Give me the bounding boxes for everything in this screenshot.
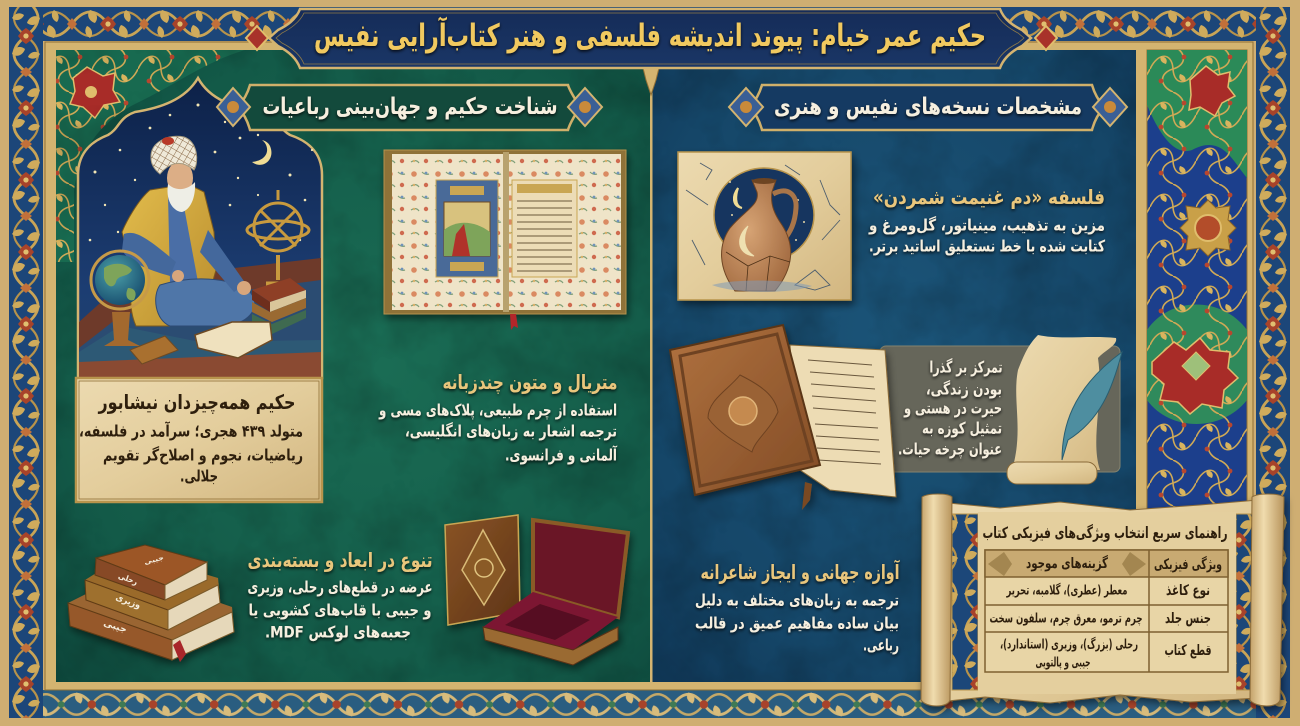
text block: transience: بودن زندگی، [926,380,1002,398]
ornament: red flower lower [1152,338,1238,414]
text block: materials: استفاده از چرم طبیعی، پلاک‌های مسی و [378,400,617,420]
table header [1026,554,1222,573]
open pages [790,345,896,497]
border: right band [1256,7,1290,718]
text block: size and packaging [248,548,432,642]
ornament: top-left corner arabesque [56,50,245,262]
table header: ویژگی فیزیکی [1154,555,1222,573]
figure: robe [122,184,216,326]
miniature page [436,180,498,277]
divider: centre gold line with finial [643,68,659,682]
text block: size and packaging: جعبه‌های لوکس MDF. [265,622,411,642]
text block: carpe diem philosophy [868,185,1106,256]
text block: carpe diem philosophy: کتابت شده با خط نستعلیق اساتید برتر. [869,236,1106,256]
bottom book: جیبی [102,619,128,635]
ornament: right inner strip [1236,514,1252,690]
icon: left medallion [729,88,763,126]
open velvet box [483,520,628,665]
table rows: معطر (عطری)، گلامبه، تحریر [1006,582,1128,598]
caption body: ریاضیات، نجوم و اصلاح‌گر تقویم [103,446,303,464]
icon: feather quill [1062,352,1122,460]
caption body: متولد ۴۳۹ هجری؛ سرآمد در فلسفه، [79,420,303,440]
table rows: نوع کاغذ [1166,583,1210,599]
icon: clay jug [722,180,791,291]
small stars [729,181,805,241]
table rows: رحلی (بزرگ)، وزیری (استاندارد)، [1000,636,1138,652]
top book [95,545,207,600]
table rows: قطع کتاب [1164,643,1212,659]
icon: small closed book [130,336,178,364]
text block: materials [378,370,618,464]
border: left band [9,7,43,718]
panel: main title banner [246,9,1057,68]
text block: transience [898,358,1002,460]
panel: left green [56,50,650,682]
icon: open book [195,322,272,358]
heading pill: right section [729,85,1127,130]
table rows: جنس جلد [1165,611,1211,627]
icon: left diamond ornament [246,26,268,50]
border: top band [9,7,1290,41]
title: حکیم عمر خیام: پیوند اندیشه فلسفی و هنر کتاب‌آرایی نفیس [314,16,986,54]
text block: materials: ترجمه اشعار به زبان‌های انگلیسی، [405,422,617,440]
panel: philosopher caption [76,378,322,502]
ornament: left inner strip [952,514,978,690]
section heading text: مشخصات نسخه‌های نفیس و هنری [774,94,1082,120]
figure: head, beard, turban [167,161,193,195]
bottom book [68,572,234,660]
text block: global fame: آوازه جهانی و ایجاز شاعرانه [700,559,900,584]
icon: right medallion [568,88,602,126]
caption body [79,420,303,486]
table rows: چرم ترمو، معرق چرم، سلفون سخت [990,612,1142,626]
illustration: jug card [678,152,851,300]
middle book: وزیری [114,593,142,611]
text block: size and packaging: و جیبی با قاب‌های کشویی یا [248,600,432,620]
icon: red ribbon [510,314,518,330]
text block: transience: عنوان چرخه حیات. [898,440,1002,460]
carpet [79,262,321,377]
caption heading: حکیم همه‌چیزدان نیشابور [98,390,296,415]
text block: global fame: ترجمه به زبان‌های مختلف به دلیل [695,590,899,610]
text block: carpe diem philosophy: مزین به تذهیب، مینیاتور، گل‌ومرغ و [868,216,1105,234]
table rows [990,582,1212,670]
text block: materials: متریال و متون چندزبانه [442,370,618,395]
heading pill: left section [217,85,602,130]
border: bottom band [9,690,1290,718]
icon: handle [773,191,796,240]
constellations [686,163,840,290]
illustration: illuminated open book [384,150,626,314]
table: physical features guide [982,523,1228,672]
middle book [85,552,220,630]
text block: transience: تمرکز بر گذرا [930,358,1002,376]
icon: crescent moon [252,140,271,165]
illustration: leather book with open pages [670,325,896,510]
top book: رحلی [117,571,139,587]
top book: جیبی [143,554,165,566]
panel: table scroll [921,494,1284,706]
illustration: three stacked books [68,545,234,662]
text block: global fame [695,559,900,654]
icon: right diamond ornament [1035,26,1057,50]
stars [89,104,313,241]
ornament: red flower top [1189,66,1235,116]
text block: size and packaging: عرضه در قطع‌های رحلی، وزیری [248,578,432,596]
closed cover [670,325,820,495]
text block: global fame: بیان ساده مفاهیم عمیق در قالب [695,614,899,632]
text block: carpe diem philosophy: فلسفه «دم غنیمت شمردن» [873,185,1105,209]
icon: left roller [921,494,952,706]
panel: right decorative column [1147,50,1247,690]
table rows: جیبی و پالتویی [1036,656,1090,670]
panel: grey callout [880,346,1120,472]
icon: armillary sphere [247,190,309,284]
icon: globe [91,251,149,346]
text block: size and packaging: تنوع در ابعاد و بسته‌بندی [248,548,432,572]
calligraphy page [512,180,577,277]
caption body: جلالی. [180,466,218,486]
figure: sleeves and hands [122,233,176,276]
text block: materials: آلمانی و فرانسوی. [505,444,617,464]
icon: moon [734,188,742,208]
wooden book cover [445,515,520,625]
illustration: slipcase and velvet box [445,515,628,665]
icon: left medallion [217,88,250,126]
icon: right roller [1250,494,1284,706]
text block: global fame: رباعی. [863,636,899,654]
panel texture [56,50,1136,682]
icon: stacked books [252,278,306,334]
text block: transience: حیرت در هستی و [903,398,1002,418]
figure: tunic and trousers [168,196,198,282]
section heading text: شناخت حکیم و جهان‌بینی رباعیات [262,94,558,120]
icon: right medallion [1093,88,1127,126]
panel: right blue [652,50,1136,682]
ornament: central medallion [1180,200,1236,256]
text block: transience: تمثیل کوزه به [922,418,1002,438]
illustration: scroll and quill [1007,335,1122,484]
table grid [985,550,1228,672]
illustration: Khayyam under the night-sky arch [78,78,322,378]
table header: گزینه‌های موجود [1026,554,1108,572]
